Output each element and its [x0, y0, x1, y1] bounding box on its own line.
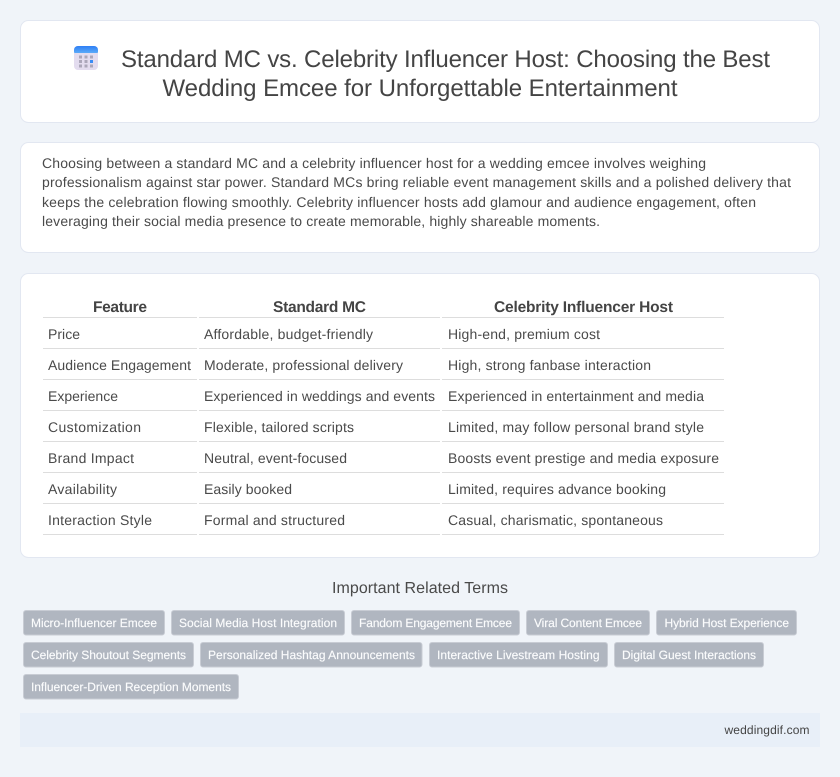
tag: Hybrid Host Experience	[664, 616, 789, 630]
row: availability	[48, 481, 666, 497]
tag	[656, 610, 796, 635]
tag: Viral Content Emcee	[534, 616, 642, 630]
row: availability: Limited, requires advance booking	[448, 481, 666, 497]
row: brand impact: Brand Impact	[48, 450, 134, 466]
title: Wedding Emcee for Unforgettable Entertainment	[162, 75, 678, 102]
row: customization: Flexible, tailored scripts	[204, 419, 354, 435]
row: customization	[48, 419, 704, 435]
row: price	[48, 326, 600, 342]
row: price: Affordable, budget-friendly	[204, 326, 373, 342]
tag: Celebrity Shoutout Segments	[31, 648, 186, 662]
row: interaction style: Formal and structured	[204, 512, 345, 528]
intro text block: professionalism against star power. Standard MCs bring reliable event management skills and a polished delivery that	[42, 174, 791, 190]
row: audience engagement	[48, 357, 651, 373]
footer source text: weddingdif.com	[724, 723, 810, 737]
intro text block: Choosing between a standard MC and a celebrity influencer host for a wedding emcee involves weighing	[42, 155, 706, 171]
row: experience: Experience	[48, 388, 118, 404]
table header row: Celebrity Influencer Host	[494, 299, 673, 316]
tag	[526, 610, 650, 635]
row: experience	[48, 388, 704, 404]
tag group: related terms	[24, 610, 796, 699]
table header row	[93, 299, 673, 316]
tag	[24, 674, 238, 699]
tag	[614, 642, 764, 667]
row: price: Price	[48, 326, 80, 342]
table rules	[43, 317, 724, 535]
tag: Interactive Livestream Hosting	[437, 648, 600, 662]
row: interaction style	[48, 512, 663, 528]
intro text block	[42, 155, 791, 229]
tag	[24, 642, 194, 667]
row: brand impact: Neutral, event-focused	[204, 450, 347, 466]
icon: calendar	[74, 46, 98, 70]
row: audience engagement: Audience Engagement	[48, 357, 191, 373]
row: interaction style: Interaction Style	[48, 512, 152, 528]
panel: header	[20, 20, 820, 122]
heading: related terms: Important Related Terms	[332, 580, 508, 597]
title: Standard MC vs. Celebrity Influencer Host: Choosing the Best	[121, 46, 770, 73]
tag: Micro-Influencer Emcee	[31, 616, 157, 630]
row: customization: Customization	[48, 419, 141, 435]
tag	[430, 642, 608, 667]
table header row: Standard MC	[273, 299, 366, 316]
row: experience: Experienced in entertainment and media	[448, 388, 704, 404]
row: interaction style: Casual, charismatic, spontaneous	[448, 512, 663, 528]
tag: Personalized Hashtag Announcements	[208, 648, 415, 662]
panel: comparison table	[20, 274, 820, 558]
row: audience engagement: High, strong fanbase interaction	[448, 357, 651, 373]
tag	[172, 610, 344, 635]
intro text block: leveraging their social media presence to create memorable, highly shareable moments.	[42, 213, 600, 229]
row: brand impact	[48, 450, 719, 466]
panel: introduction	[20, 142, 820, 252]
tag	[200, 642, 422, 667]
tag: Fandom Engagement Emcee	[359, 616, 512, 630]
intro text block: keeps the celebration flowing smoothly. Celebrity influencer hosts add glamour and audience engagement, often	[42, 194, 756, 210]
row: customization: Limited, may follow personal brand style	[448, 419, 704, 435]
title	[121, 46, 770, 102]
row: availability: Availability	[48, 481, 117, 497]
tag: Digital Guest Interactions	[622, 648, 756, 662]
table header row: Feature	[93, 299, 147, 316]
tag	[24, 610, 164, 635]
row: price: High-end, premium cost	[448, 326, 600, 342]
row: audience engagement: Moderate, professional delivery	[204, 357, 403, 373]
row: brand impact: Boosts event prestige and media exposure	[448, 450, 719, 466]
row: experience: Experienced in weddings and events	[204, 388, 435, 404]
tag: Influencer-Driven Reception Moments	[31, 680, 231, 694]
tag	[352, 610, 520, 635]
footer bar	[20, 713, 820, 747]
row: availability: Easily booked	[204, 481, 292, 497]
tag: Social Media Host Integration	[179, 616, 337, 630]
